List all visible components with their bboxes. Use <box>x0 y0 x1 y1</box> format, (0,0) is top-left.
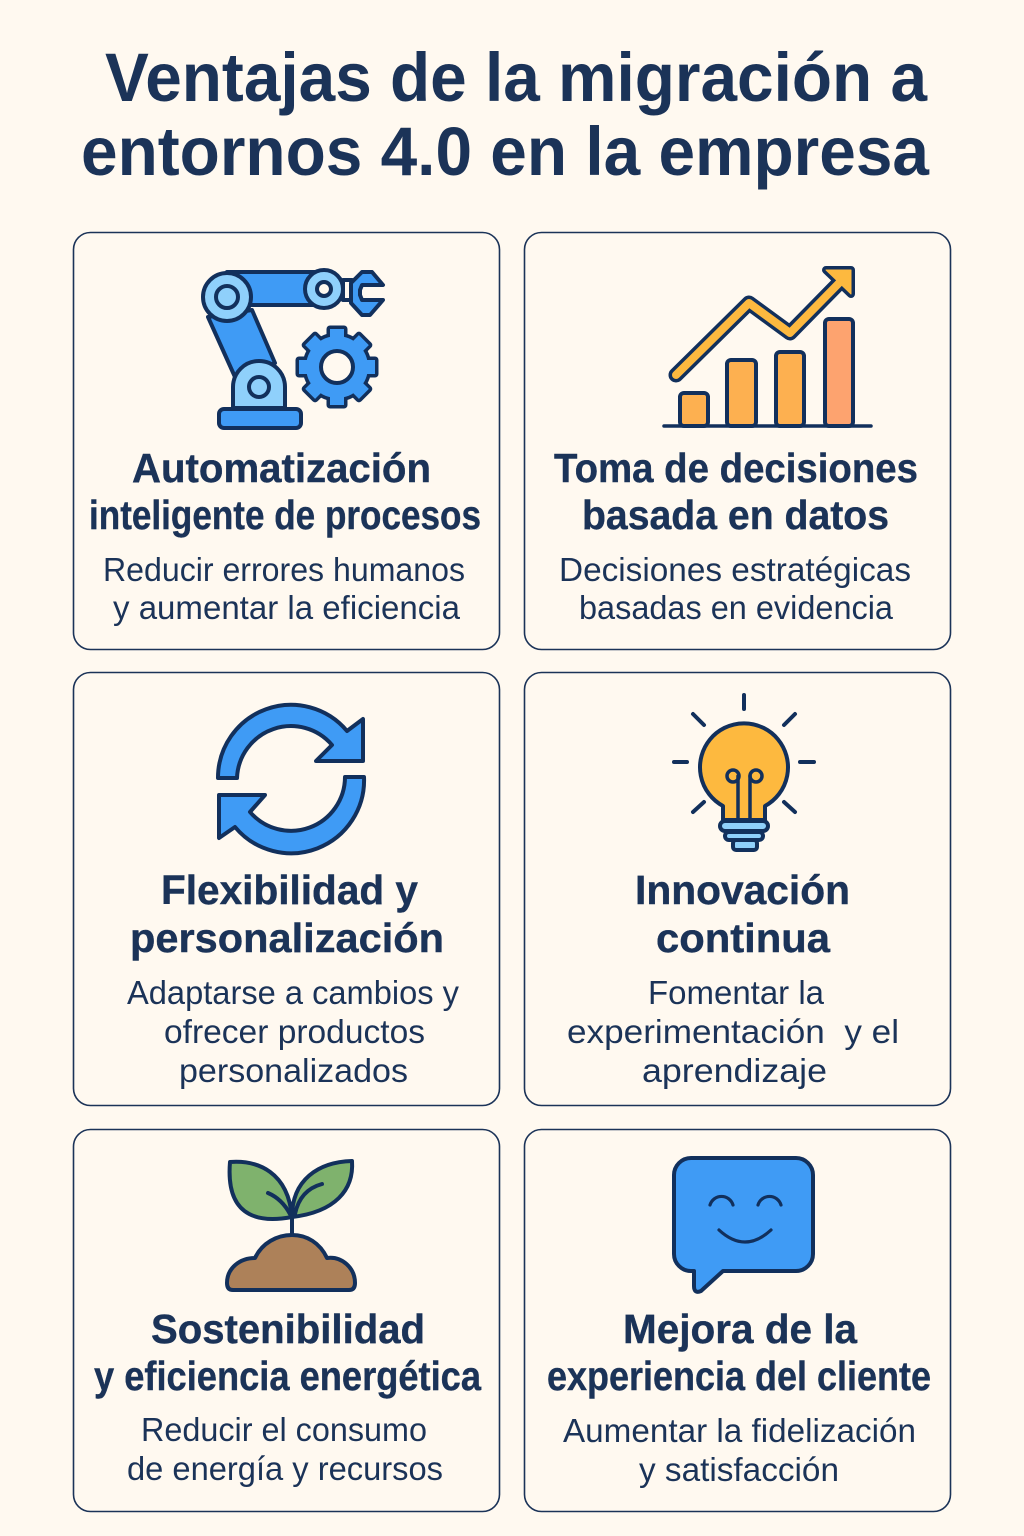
panel: experiencia del cliente <box>524 1130 950 1512</box>
heading: Innovación <box>635 867 850 913</box>
text block: experimentación y el <box>567 1013 899 1050</box>
heading <box>635 867 850 961</box>
heading <box>547 1306 931 1399</box>
text block: Fomentar la <box>648 974 825 1011</box>
text block: Reducir el consumo <box>141 1411 427 1448</box>
title <box>81 39 930 190</box>
text block: personalizados <box>179 1052 408 1089</box>
panel: innovación <box>524 672 950 1106</box>
text block: Adaptarse a cambios y <box>127 974 459 1011</box>
text block <box>127 974 459 1089</box>
icon: light bulb <box>674 695 814 850</box>
text block: basadas en evidencia <box>579 589 894 626</box>
title: Ventajas de la migración a <box>105 39 928 116</box>
icon: smiling speech bubble <box>674 1158 813 1292</box>
heading: basada en datos <box>582 492 889 538</box>
text block: Reducir errores humanos <box>103 551 465 588</box>
title: entornos 4.0 en la empresa <box>81 113 930 190</box>
text block: Aumentar la fidelización <box>563 1412 916 1449</box>
heading: continua <box>656 915 831 961</box>
text block: y aumentar la eficiencia <box>113 589 461 626</box>
heading: Toma de decisiones <box>554 445 918 491</box>
text block: de energía y recursos <box>127 1450 443 1487</box>
text block: aprendizaje <box>642 1052 827 1089</box>
text block <box>559 551 911 626</box>
text block: y satisfacción <box>639 1451 839 1488</box>
heading: inteligente de procesos <box>89 492 481 538</box>
icon: robot arm and gear <box>203 270 383 428</box>
heading: experiencia del cliente <box>547 1353 931 1399</box>
panel: flexibilidad <box>74 672 500 1106</box>
heading: Mejora de la <box>623 1306 858 1352</box>
panel: sostenibilidad <box>74 1130 500 1512</box>
heading: Automatización <box>132 445 431 491</box>
text block: Decisiones estratégicas <box>559 551 911 588</box>
icon: sprout in soil <box>227 1161 355 1290</box>
text block <box>563 1412 916 1488</box>
text block: ofrecer productos <box>164 1013 425 1050</box>
text block <box>103 551 465 626</box>
heading: Sostenibilidad <box>151 1306 425 1352</box>
icon: refresh arrows <box>218 705 364 853</box>
heading <box>130 867 444 961</box>
panel: automatización inteligente <box>74 232 500 650</box>
heading: personalización <box>130 915 444 961</box>
heading <box>89 445 481 538</box>
text block <box>127 1411 443 1487</box>
heading <box>94 1306 482 1399</box>
panel: toma de decisiones <box>524 232 950 650</box>
heading <box>554 445 918 538</box>
heading: Flexibilidad y <box>161 867 418 913</box>
heading: y eficiencia energética <box>94 1353 482 1399</box>
icon: bar chart with rising arrow <box>664 270 871 426</box>
text block <box>567 974 899 1089</box>
